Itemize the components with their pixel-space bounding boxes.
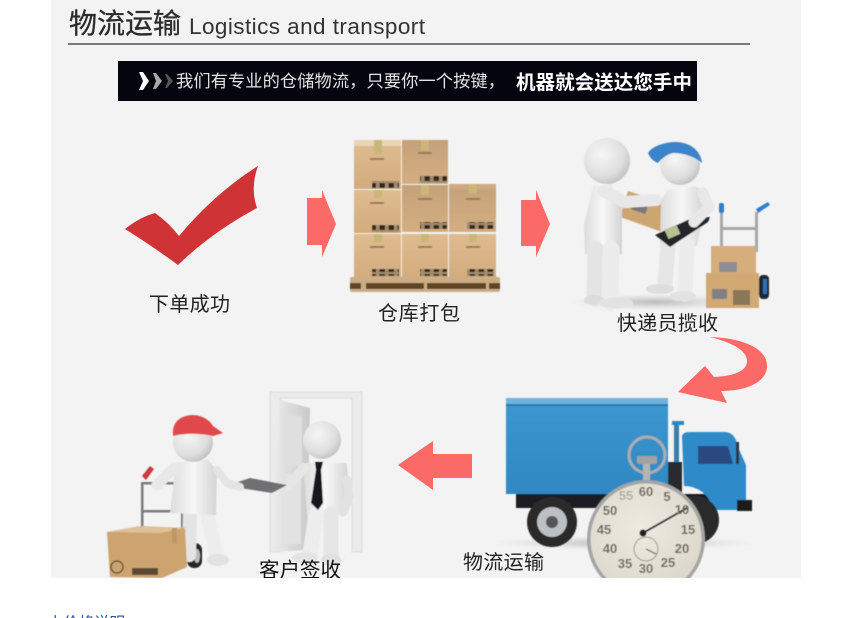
figure: recipient xyxy=(287,421,349,566)
illustration: customer signing xyxy=(107,392,362,582)
label: warehouse packing: 仓库打包 xyxy=(378,302,460,325)
carton being handed over xyxy=(620,191,663,232)
illustration: stacked cartons on pallet xyxy=(350,140,500,292)
title: 物流运输 xyxy=(69,8,181,39)
icon: barcode scanner xyxy=(655,217,710,247)
figure: delivery man xyxy=(157,415,240,566)
carton on hand truck xyxy=(107,526,187,578)
arrow: truck to customer xyxy=(398,441,472,490)
banner: 我们有专业的仓储物流，只要你一个按键， xyxy=(176,71,505,91)
stopwatch xyxy=(587,437,705,598)
banner xyxy=(118,61,697,101)
stopwatch numerals: 10 xyxy=(675,502,689,517)
stopwatch numerals: 55 xyxy=(619,488,633,503)
figure: customer xyxy=(584,138,656,308)
title xyxy=(69,8,426,39)
stopwatch numerals: 15 xyxy=(681,522,695,537)
illustration: courier collecting parcel xyxy=(570,138,770,310)
icon: black tie xyxy=(311,462,323,510)
stopwatch numerals: 60 xyxy=(639,484,653,499)
icon: red check mark xyxy=(125,166,258,265)
stopwatch numerals: 25 xyxy=(661,555,675,570)
stopwatch numerals: 20 xyxy=(675,541,689,556)
arrow: curved courier to truck xyxy=(678,337,767,403)
label: courier pickup: 快递员揽收 xyxy=(617,312,718,335)
arrow: warehouse to courier xyxy=(521,190,550,257)
door xyxy=(270,392,362,552)
label: transport: 物流运输 xyxy=(463,551,544,574)
figure: courier xyxy=(646,142,710,301)
icon: hand truck with cartons xyxy=(706,202,770,308)
stopwatch numerals xyxy=(597,484,695,576)
illustration: truck and stopwatch xyxy=(505,397,753,578)
stopwatch numerals: 5 xyxy=(663,489,671,504)
label: order placed: 下单成功 xyxy=(149,293,230,316)
stopwatch numerals: 50 xyxy=(603,503,617,518)
stopwatch numerals: 40 xyxy=(603,541,617,556)
hand truck and carton xyxy=(141,465,202,568)
banner: 机器就会送达您手中 xyxy=(516,71,692,94)
stopwatch numerals: 45 xyxy=(597,522,611,537)
truck xyxy=(493,398,757,550)
icon: clipboard xyxy=(235,478,287,493)
stopwatch numerals: 35 xyxy=(618,556,632,571)
label: customer signature: 客户签收 xyxy=(259,559,341,582)
stopwatch numerals: 30 xyxy=(639,561,653,576)
icon: banner chevrons xyxy=(139,72,173,90)
title: Logistics and transport xyxy=(189,14,426,39)
arrow: order to warehouse xyxy=(307,190,336,257)
